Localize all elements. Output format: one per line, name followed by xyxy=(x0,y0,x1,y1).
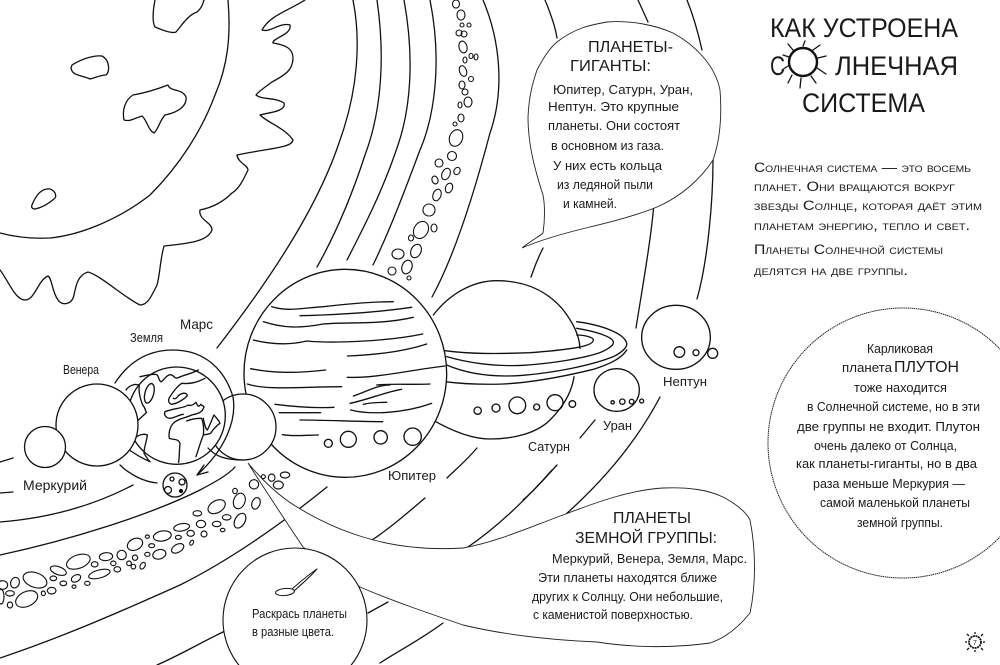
pluto text: планета xyxy=(842,360,893,375)
intro text: Планеты Солнечной системы xyxy=(754,242,943,257)
intro text: Солнечная система — это восемь xyxy=(754,160,971,175)
intro text xyxy=(754,160,982,278)
terrestrial bubble text: других к Солнцу. Они небольшие, xyxy=(532,589,723,604)
mercury xyxy=(24,426,66,468)
terrestrial bubble text xyxy=(532,551,747,622)
sun corona xyxy=(0,0,305,305)
jupiter xyxy=(244,269,447,477)
sun spots xyxy=(153,0,204,33)
hint text: Раскрась планеты xyxy=(252,606,347,621)
moon xyxy=(163,473,187,497)
title: ЛНЕЧНАЯ xyxy=(835,51,958,81)
terrestrial bubble text: с каменистой поверхностью. xyxy=(533,607,693,622)
pluto text xyxy=(796,341,980,530)
earth continents xyxy=(126,370,220,462)
planet labels: Меркурий xyxy=(23,477,87,493)
title: С xyxy=(770,51,785,81)
giant bubble heading: ПЛАНЕТЫ- xyxy=(588,39,673,56)
planet labels: Юпитер xyxy=(388,469,436,483)
giant bubble text: из ледяной пыли xyxy=(557,177,653,192)
planet labels: Уран xyxy=(603,419,632,433)
pluto text: тоже находится xyxy=(854,380,947,395)
giant bubble text: У них есть кольца xyxy=(553,158,663,173)
giant bubble text: и камней. xyxy=(563,196,617,211)
intro text: звезды Солнце, которая даёт этим xyxy=(754,198,982,213)
speech bubble: giant planets xyxy=(522,22,721,248)
title: КАК УСТРОЕНА xyxy=(770,13,958,43)
orbit lines xyxy=(0,0,713,665)
giant bubble text: Нептун. Это крупные xyxy=(548,99,679,114)
giant bubble heading xyxy=(570,39,673,75)
planet labels: Нептун xyxy=(663,375,707,389)
hint text: в разные цвета. xyxy=(252,624,334,639)
speech bubble: terrestrial planets xyxy=(248,463,754,647)
intro text: планетам энергию, тепло и свет. xyxy=(754,218,970,233)
planet labels: Венера xyxy=(63,363,99,377)
coloring hint bubble xyxy=(223,548,367,665)
title xyxy=(770,13,958,118)
giant bubble text: Юпитер, Сатурн, Уран, xyxy=(553,82,693,97)
terrestrial bubble heading: ЗЕМНОЙ ГРУППЫ: xyxy=(575,528,717,547)
hint text xyxy=(252,606,347,639)
title: СИСТЕМА xyxy=(802,88,925,118)
saturn rings xyxy=(445,322,627,384)
neptune xyxy=(642,305,718,369)
lower asteroid belt xyxy=(0,472,290,611)
icon: paint brush xyxy=(275,569,317,596)
page number sun: 7 xyxy=(973,640,977,647)
terrestrial bubble heading: ПЛАНЕТЫ xyxy=(613,510,691,527)
uranus xyxy=(594,369,644,411)
sun disc edge xyxy=(0,0,229,238)
mars xyxy=(210,394,276,460)
giant bubble text: в основном из газа. xyxy=(551,138,664,153)
pluto text: очень далеко от Солнца, xyxy=(814,438,957,453)
jupiter spots xyxy=(324,428,421,447)
upper asteroid belt xyxy=(388,0,478,280)
pluto text: Карликовая xyxy=(867,341,933,356)
pluto circle xyxy=(768,308,1000,578)
intro text: делятся на две группы. xyxy=(754,263,908,278)
pluto text: ПЛУТОН xyxy=(894,359,959,376)
terrestrial bubble text: Эти планеты находятся ближе xyxy=(538,570,717,585)
saturn xyxy=(432,281,627,439)
pluto text: самой маленькой планеты xyxy=(820,495,970,510)
venus xyxy=(56,384,138,466)
giant bubble text: планеты. Они состоят xyxy=(548,118,680,133)
giant bubble text xyxy=(548,82,693,211)
pluto text: земной группы. xyxy=(857,515,943,530)
terrestrial bubble text: Меркурий, Венера, Земля, Марс. xyxy=(552,551,747,566)
saturn spots xyxy=(474,395,576,414)
terrestrial bubble heading xyxy=(575,510,717,547)
pluto text: как планеты-гиганты, но в два xyxy=(796,456,978,471)
intro text: планет. Они вращаются вокруг xyxy=(754,179,955,194)
pluto text: в Солнечной системе, но в эти xyxy=(807,399,980,414)
mars orbit arc and arrow xyxy=(115,350,234,475)
planet labels xyxy=(23,316,707,493)
jupiter bands xyxy=(247,302,445,436)
planet labels: Марс xyxy=(180,316,213,332)
pluto text: две группы не входит. Плутон xyxy=(797,419,980,434)
page number sun xyxy=(965,632,985,652)
mars outline over earth xyxy=(208,448,243,460)
pluto text: раза меньше Меркурия — xyxy=(813,476,965,491)
planet labels: Земля xyxy=(130,331,163,345)
planet labels: Сатурн xyxy=(528,440,570,454)
earth xyxy=(126,367,225,464)
icon: sun in title xyxy=(782,41,826,88)
giant bubble heading: ГИГАНТЫ: xyxy=(570,58,651,75)
sun xyxy=(0,0,305,305)
